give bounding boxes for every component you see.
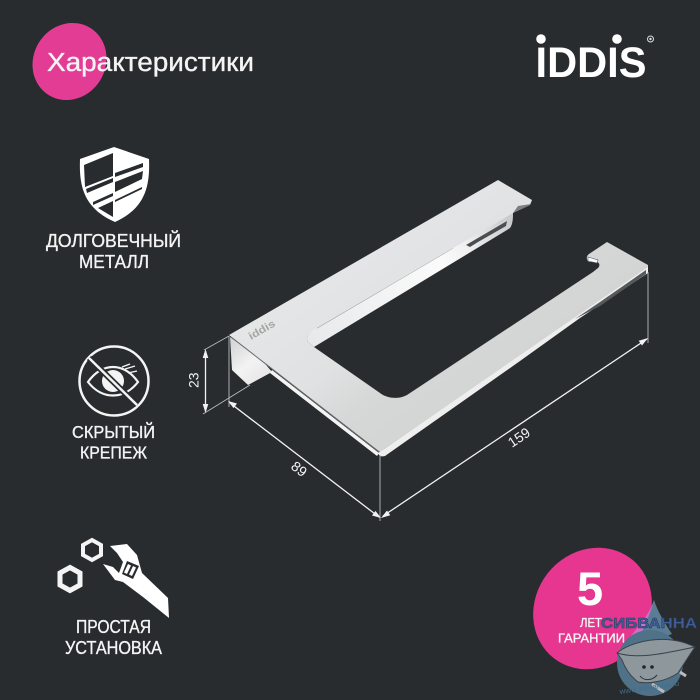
chrome edge of lower arm bbox=[378, 267, 648, 456]
logo: IDDIS: IDDIS bbox=[536, 39, 646, 87]
warranty badge bbox=[509, 524, 676, 693]
heading: Характеристики on pink blob: Характеристики bbox=[47, 49, 254, 77]
heading: Характеристики on pink blob bbox=[18, 9, 254, 114]
dimension: height 23: 23 bbox=[186, 372, 202, 388]
watermark name: СИБВАННА bbox=[601, 615, 697, 632]
label: easy installation: ПРОСТАЯ bbox=[76, 617, 151, 637]
label: hidden fastening: КРЕПЕЖ bbox=[80, 442, 147, 462]
dimension: height 23 bbox=[186, 336, 250, 414]
icon: nuts and wrench bbox=[60, 540, 169, 618]
main plate bbox=[229, 180, 648, 452]
chrome strip under upper arm bbox=[307, 212, 513, 347]
warranty badge: 5 bbox=[577, 562, 603, 615]
warranty badge: ЛЕТ bbox=[580, 615, 602, 630]
label: hidden fastening bbox=[72, 421, 155, 462]
watermark: bath mascot bbox=[601, 600, 697, 696]
bath body bbox=[617, 639, 695, 683]
notch highlight bbox=[588, 257, 598, 263]
label: hidden fastening: СКРЫТЫЙ bbox=[72, 421, 155, 442]
dimension: depth 89 bbox=[228, 401, 381, 521]
blue circle bbox=[617, 630, 683, 696]
label: easy installation: УСТАНОВКА bbox=[65, 638, 162, 658]
label: durable metal: ДОЛГОВЕЧНЫЙ bbox=[46, 230, 181, 251]
chrome edge of front side bbox=[270, 370, 379, 456]
upper arm end shade bbox=[513, 204, 531, 213]
feature: easy installation bbox=[60, 540, 169, 658]
wall mount side bbox=[230, 337, 272, 385]
watermark url: www.sibvanna.ru bbox=[618, 679, 680, 696]
legs bbox=[652, 672, 686, 692]
water drop bbox=[617, 600, 672, 655]
icon: crossed-out eye bbox=[80, 346, 148, 416]
label: durable metal bbox=[46, 230, 181, 272]
feature: durable metal bbox=[46, 147, 181, 272]
label: durable metal: МЕТАЛЛ bbox=[79, 252, 149, 272]
drop over badge bbox=[617, 600, 654, 655]
icon: shield bbox=[80, 147, 149, 222]
warranty badge: ГАРАНТИИ bbox=[558, 630, 625, 646]
product: chrome holder bbox=[229, 180, 648, 456]
dimension: depth 89: 89 bbox=[288, 458, 310, 480]
dimension: length 159 bbox=[381, 272, 648, 518]
feature: hidden fastening bbox=[72, 346, 155, 462]
dimension: length 159: 159 bbox=[505, 424, 533, 450]
logo on product: iddis bbox=[246, 318, 278, 343]
face bbox=[642, 665, 646, 669]
label: easy installation bbox=[65, 617, 162, 658]
